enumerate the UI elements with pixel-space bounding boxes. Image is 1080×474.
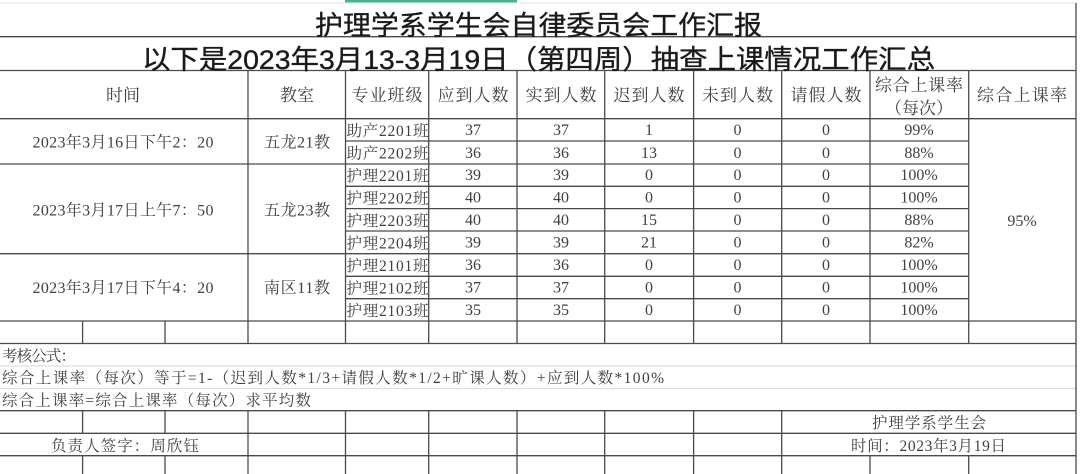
date and classroom cells xyxy=(32,132,330,297)
data rows: 39 xyxy=(553,234,569,252)
date and classroom cells: 2023年3月17日上午7：50 xyxy=(32,200,214,220)
data rows: 0 xyxy=(822,280,830,296)
data rows: 0 xyxy=(645,190,653,206)
date and classroom cells: 五龙23教 xyxy=(264,202,330,220)
table header: 综合上课率 xyxy=(977,86,1067,105)
data rows: 39 xyxy=(553,167,569,184)
data rows: 0 xyxy=(734,280,742,296)
data rows: 40 xyxy=(553,212,569,229)
data rows: 0 xyxy=(734,190,742,206)
data rows: 0 xyxy=(734,212,742,229)
data rows: 36 xyxy=(553,145,569,162)
table header: 实到人数 xyxy=(526,86,596,105)
class names: 护理2204班 xyxy=(346,234,429,252)
overall rate: 95% xyxy=(1007,213,1037,230)
assessment formula: 综合上课率=综合上课率（每次）求平均数 xyxy=(2,392,311,410)
data rows: 0 xyxy=(822,257,830,274)
date: 时间：2023年3月19日 xyxy=(851,436,1006,455)
data rows: 39 xyxy=(465,167,481,184)
green tab at top xyxy=(345,0,517,3)
date and classroom cells: 南区11教 xyxy=(264,279,330,297)
class names: 护理2102班 xyxy=(346,280,429,298)
data rows: 0 xyxy=(645,257,653,274)
assessment formula xyxy=(2,347,664,410)
table header: 教室 xyxy=(280,86,314,105)
class names: 护理2202班 xyxy=(346,190,429,208)
data rows: 35 xyxy=(553,302,569,319)
data rows: 37 xyxy=(553,122,569,139)
data rows: 0 xyxy=(734,122,742,139)
data rows: 99% xyxy=(904,122,934,139)
data rows: 0 xyxy=(645,280,653,296)
date and classroom cells: 五龙21教 xyxy=(264,134,330,152)
data rows: 40 xyxy=(465,212,481,229)
data rows: 0 xyxy=(734,145,742,162)
class names xyxy=(346,122,429,320)
data rows: 13 xyxy=(641,145,657,162)
class names: 助产2201班 xyxy=(346,122,429,140)
table header: 请假人数 xyxy=(790,86,862,105)
data rows xyxy=(465,122,938,319)
data rows: 40 xyxy=(465,190,481,206)
data rows: 37 xyxy=(465,122,481,139)
class names: 护理2101班 xyxy=(346,257,429,275)
data rows: 36 xyxy=(553,257,569,274)
data rows: 0 xyxy=(822,145,830,162)
data rows: 35 xyxy=(465,302,481,319)
data rows: 0 xyxy=(822,302,830,319)
data rows: 37 xyxy=(465,280,481,296)
data rows: 39 xyxy=(465,234,481,252)
data rows: 0 xyxy=(734,302,742,319)
data rows: 88% xyxy=(904,212,934,229)
signature: 负责人签字：周欣钰 xyxy=(51,437,199,455)
table header: 综合上课率 xyxy=(875,76,963,95)
table header: 专业班级 xyxy=(352,86,422,105)
date and classroom cells: 2023年3月16日下午2：20 xyxy=(32,132,214,152)
assessment formula: 考核公式： xyxy=(2,347,76,365)
data rows: 15 xyxy=(641,212,657,229)
data rows: 0 xyxy=(734,234,742,252)
data rows: 0 xyxy=(734,167,742,184)
data rows: 0 xyxy=(822,122,830,139)
table header: 迟到人数 xyxy=(614,86,684,105)
data rows: 0 xyxy=(734,257,742,274)
data rows: 0 xyxy=(822,212,830,229)
date and classroom cells: 2023年3月17日下午4：20 xyxy=(32,278,214,297)
data rows: 36 xyxy=(465,257,481,274)
table header: 应到人数 xyxy=(438,86,508,105)
data rows: 82% xyxy=(904,234,934,252)
data rows: 40 xyxy=(553,190,569,206)
class names: 护理2103班 xyxy=(346,302,429,320)
class names: 护理2201班 xyxy=(346,167,429,185)
data rows: 0 xyxy=(822,190,830,206)
data rows: 37 xyxy=(553,280,569,296)
data rows: 0 xyxy=(822,234,830,252)
data rows: 100% xyxy=(900,190,938,206)
data rows: 100% xyxy=(900,257,938,274)
table header: （每次） xyxy=(885,99,953,118)
class names: 助产2202班 xyxy=(346,144,429,162)
table header: 时间 xyxy=(106,86,140,105)
data rows: 36 xyxy=(465,145,481,162)
class names: 护理2203班 xyxy=(346,212,429,230)
table header xyxy=(106,76,1067,118)
data rows: 100% xyxy=(900,280,938,296)
table header: 未到人数 xyxy=(702,86,773,105)
data rows: 1 xyxy=(645,122,653,139)
title: 护理学系学生会自律委员会工作汇报 xyxy=(315,11,762,41)
data rows: 21 xyxy=(641,234,657,252)
data rows: 0 xyxy=(645,302,653,319)
assessment formula: 综合上课率（每次）等于=1-（迟到人数*1/3+请假人数*1/2+旷课人数）+应到人数*100% xyxy=(2,369,664,387)
subtitle: 以下是2023年3月13-3月19日（第四周）抽查上课情况工作汇总 xyxy=(142,45,935,75)
data rows: 0 xyxy=(645,167,653,184)
data rows: 100% xyxy=(900,167,938,184)
data rows: 100% xyxy=(900,302,938,319)
data rows: 88% xyxy=(904,145,934,162)
department: 护理学系学生会 xyxy=(872,414,986,432)
data rows: 0 xyxy=(822,167,830,184)
